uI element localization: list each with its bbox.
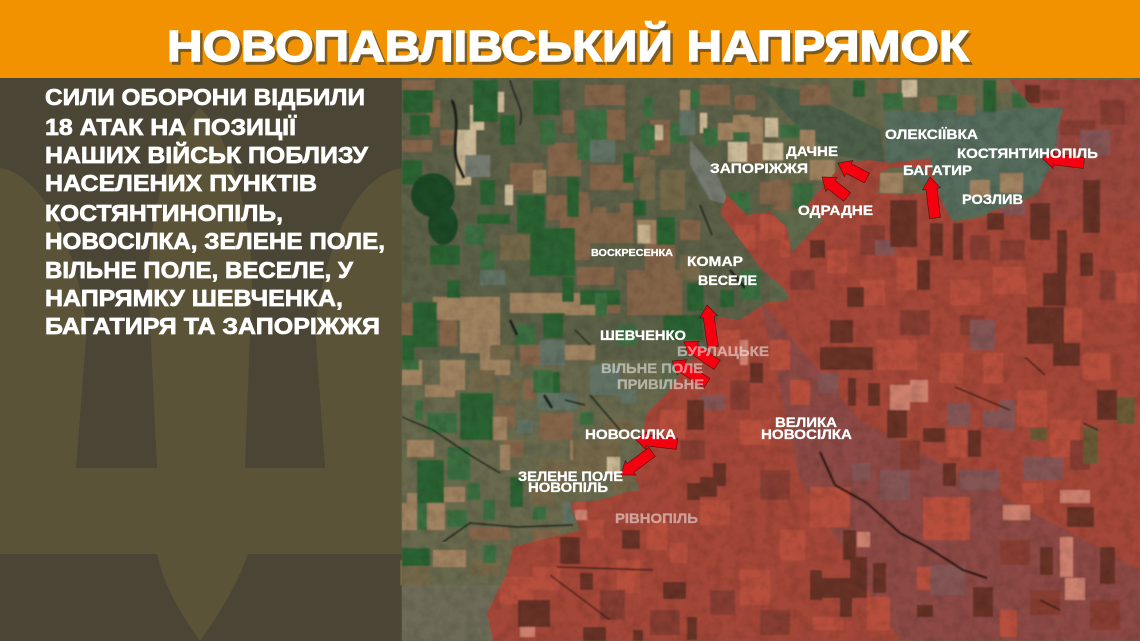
map labels: ДАЧНЕ (786, 143, 838, 159)
map labels: ЗАПОРІЖЖЯ (710, 160, 808, 176)
text block: attack summary: НАПРЯМКУ ШЕВЧЕНКА, (45, 285, 343, 311)
map labels: НОВОПІЛЬ (528, 479, 608, 495)
map labels: ВЕСЕЛЕ (698, 272, 757, 288)
arrow: towards Новосілка (634, 430, 678, 453)
text block: attack summary: СИЛИ ОБОРОНИ ВІДБИЛИ (45, 84, 365, 110)
map: texture (402, 78, 1140, 641)
map labels: БУРЛАЦЬКЕ (677, 343, 769, 359)
map labels: КОСТЯНТИНОПІЛЬ (957, 145, 1098, 161)
map labels: ВОСКРЕСЕНКА (591, 247, 673, 259)
map labels: ОЛЕКСІЇВКА (885, 126, 978, 142)
panel: left text panel (0, 78, 402, 641)
header banner (0, 0, 1140, 78)
arrow: towards Зелене Поле (616, 445, 657, 482)
map labels: ВІЛЬНЕ ПОЛЕ (601, 360, 703, 376)
map labels: ПРИВІЛЬНЕ (617, 376, 704, 392)
map labels: НОВОСІЛКА (585, 426, 676, 442)
arrow: towards Багатир (921, 176, 944, 219)
arrow: Костянтинопіль (1041, 149, 1085, 172)
arrow: towards Шевченко (679, 335, 722, 372)
map labels: ОДРАДНЕ (798, 202, 873, 218)
arrow: towards Вільне Поле (667, 353, 712, 391)
map labels: КОМАР (687, 253, 743, 269)
text block: attack summary: НАШИХ ВІЙСЬК ПОБЛИЗУ (45, 141, 369, 168)
text block: attack summary: БАГАТИРЯ ТА ЗАПОРІЖЖЯ (45, 313, 380, 339)
map: occupied zone in red (487, 80, 1140, 641)
map labels: ВЕЛИКА (775, 414, 837, 430)
arrows: attack directions (616, 149, 1085, 482)
text block: attack summary: НОВОСІЛКА, ЗЕЛЕНЕ ПОЛЕ, (45, 228, 385, 254)
map labels: РІВНОПІЛЬ (615, 510, 698, 526)
map labels: БАГАТИР (903, 162, 972, 178)
map: rivers (402, 80, 745, 542)
map labels: ШЕВЧЕНКО (600, 327, 686, 343)
map labels: РОЗЛИВ (962, 191, 1023, 207)
arrow: towards Одрадне (816, 170, 853, 204)
icon: trident watermark (0, 108, 402, 641)
title: НОВОПАВЛІВСЬКИЙ НАПРЯМОК (167, 20, 969, 71)
text block: attack summary: КОСТЯНТИНОПІЛЬ, (45, 200, 283, 226)
text block: attack summary: НАСЕЛЕНИХ ПУНКТІВ (45, 170, 317, 196)
text block: attack summary: 18 АТАК НА ПОЗИЦІЇ (45, 114, 297, 140)
map: forest patches (411, 173, 458, 245)
text block: attack summary (45, 84, 385, 339)
arrow: towards Веселе (698, 304, 722, 348)
arrow: towards Дачне (834, 155, 871, 186)
map: satellite view with occupied zone (400, 78, 1140, 641)
title: НОВОПАВЛІВСЬКИЙ НАПРЯМОК (170, 23, 972, 74)
map: natural fields (400, 78, 1063, 641)
map labels: НОВОСІЛКА (761, 426, 852, 442)
text block: attack summary: ВІЛЬНЕ ПОЛЕ, ВЕСЕЛЕ, У (45, 257, 354, 283)
map labels (518, 126, 1098, 526)
map labels: ЗЕЛЕНЕ ПОЛЕ (518, 468, 623, 484)
map: rivers in occupied zone (550, 357, 1098, 620)
